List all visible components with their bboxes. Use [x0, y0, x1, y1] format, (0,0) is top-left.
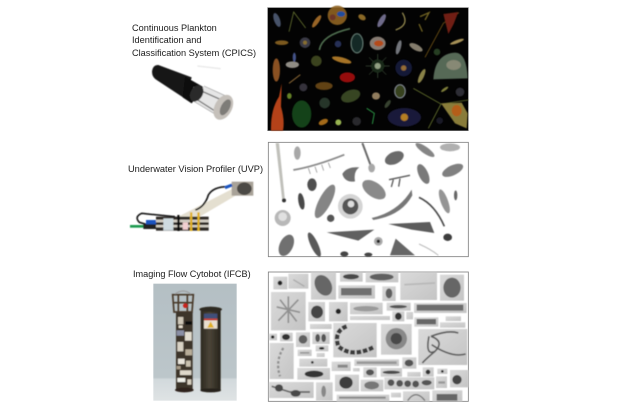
photo: UVP instrument	[130, 182, 253, 231]
organism: large round colourful top	[328, 6, 347, 25]
icon: cage top	[173, 291, 193, 312]
heading: CPICS: Identification and	[132, 35, 201, 45]
image panel: UVP grayscale plankton	[268, 141, 468, 258]
photo: CPICS camera instrument	[152, 65, 237, 123]
image panel: IFCB grayscale plankton mosaic	[268, 272, 468, 401]
photo: IFCB instrument and housing	[153, 284, 237, 401]
heading: IFCB: Imaging Flow Cytobot (IFCB)	[133, 269, 251, 279]
organism: radiating star	[366, 54, 390, 78]
heading: CPICS: Continuous Plankton	[132, 23, 217, 33]
image panel: CPICS plankton on black	[268, 6, 468, 131]
heading: CPICS: Classification System (CPICS)	[132, 48, 256, 58]
organism: long segmented worm	[293, 155, 344, 174]
heading: CPICS	[132, 23, 256, 58]
heading: UVP: Underwater Vision Profiler (UVP)	[128, 164, 263, 174]
